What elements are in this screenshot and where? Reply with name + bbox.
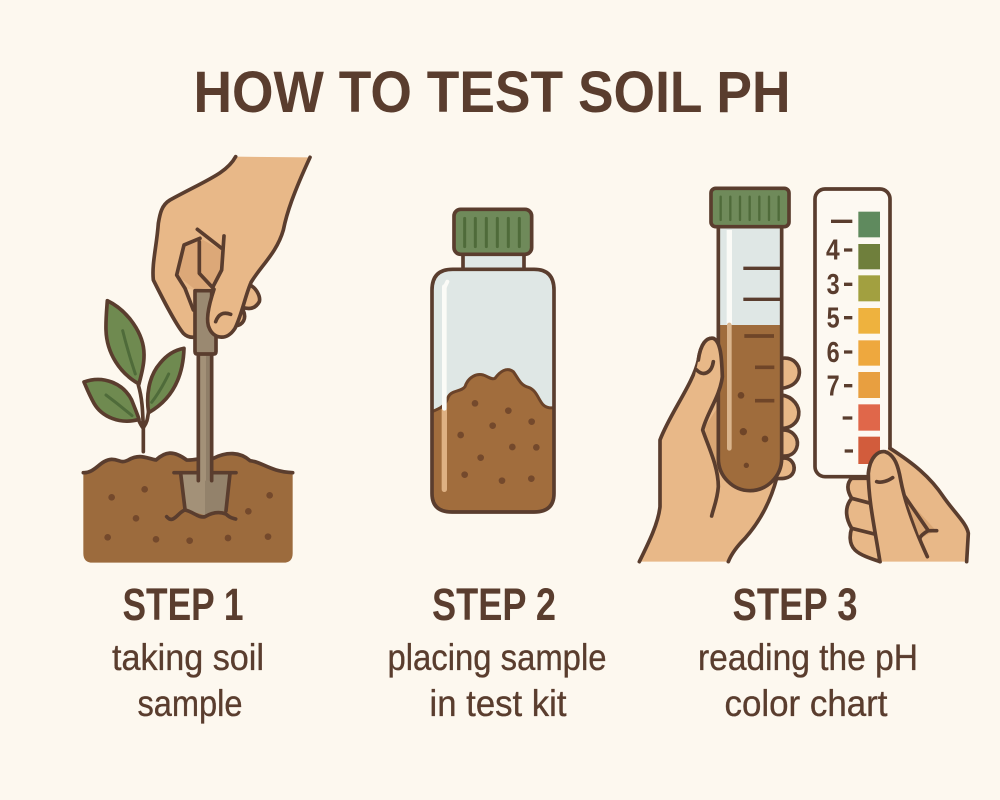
text: step 1 description: sample bbox=[138, 683, 242, 724]
text: step 3 description: reading the pH bbox=[698, 637, 918, 678]
panel: step 3 bbox=[639, 188, 968, 724]
illustration: jar with soil sample bbox=[432, 209, 554, 512]
labels: pH numbers: 6 bbox=[827, 337, 840, 369]
heading: step 3: STEP 3 bbox=[732, 579, 858, 630]
text: step 2 description: in test kit bbox=[430, 683, 567, 724]
heading: step 1: STEP 1 bbox=[122, 579, 244, 630]
icon: trowel blade and shaft bbox=[167, 354, 236, 519]
text: step 1 description: taking soil bbox=[112, 637, 264, 678]
icon: right hand holding chart bbox=[847, 448, 968, 562]
icon: green tube cap bbox=[711, 188, 789, 227]
heading: step 2: STEP 2 bbox=[432, 579, 556, 630]
swatches: colour scale bbox=[858, 212, 880, 464]
title: HOW TO TEST SOIL PH bbox=[194, 60, 790, 125]
icon: jar neck bbox=[463, 253, 524, 269]
labels: pH numbers: 5 bbox=[827, 303, 840, 335]
labels: pH numbers bbox=[826, 234, 840, 403]
labels: pH numbers: 3 bbox=[827, 269, 840, 301]
icon: hand gripping trowel bbox=[153, 157, 310, 354]
icon: soil mound bbox=[83, 453, 293, 563]
icon: jar body with soil bbox=[432, 269, 554, 512]
icon: plant bbox=[84, 301, 184, 452]
text: step 2 description: placing sample bbox=[388, 637, 606, 678]
panel: step 1 bbox=[83, 157, 310, 724]
illustration: hands holding test tube and pH chart bbox=[639, 188, 968, 562]
chart: pH colour strip bbox=[815, 189, 890, 477]
labels: pH numbers: 7 bbox=[827, 371, 840, 403]
icon: left hand holding tube bbox=[639, 338, 799, 562]
labels: pH numbers: 4 bbox=[826, 234, 840, 266]
icon: test tube with soil bbox=[718, 226, 782, 491]
illustration: hand digging soil with trowel beside a plant bbox=[83, 157, 310, 563]
text: step 3 description: color chart bbox=[724, 683, 888, 724]
icon: green lid bbox=[454, 209, 532, 254]
panel: step 2 bbox=[388, 209, 606, 724]
icon: left thumb bbox=[680, 338, 722, 516]
